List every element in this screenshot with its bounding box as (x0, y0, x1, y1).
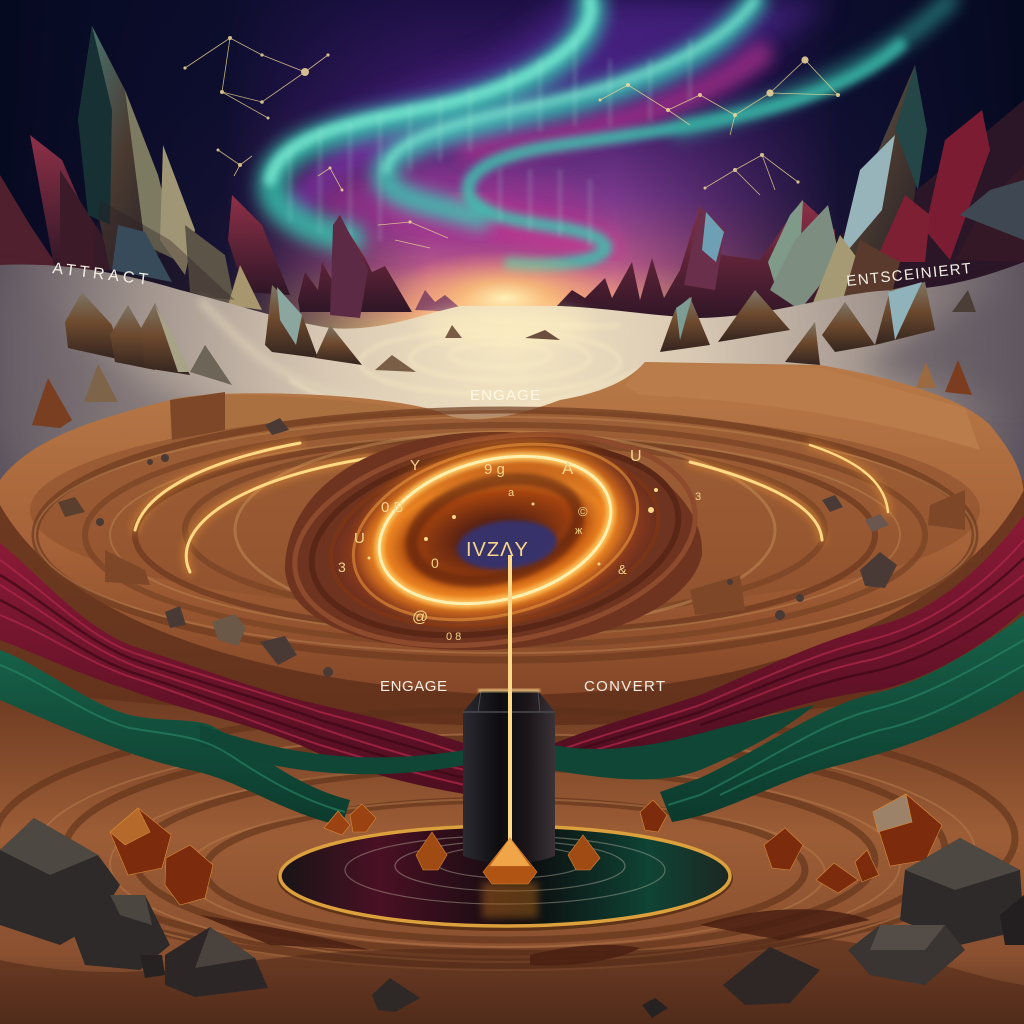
floating glyphs: © (578, 504, 588, 519)
floating glyphs: 9 g (484, 461, 505, 478)
horizon sun glow (385, 250, 625, 346)
label: entsceiniert: ENTSCEINIERT (846, 260, 972, 290)
central vortex (280, 408, 710, 672)
lower ground (0, 680, 1024, 1024)
floating glyphs: IVZΛY (466, 539, 529, 561)
floating glyphs: a (508, 487, 515, 499)
dark foreground rocks (0, 818, 1024, 1018)
floating glyphs: 0 (431, 555, 439, 571)
terrace boulders (58, 418, 897, 677)
vortex core (455, 516, 559, 574)
floating glyphs: U (354, 530, 365, 547)
floating glyphs: 0 8 (446, 631, 461, 643)
glowing ring (335, 416, 656, 648)
floating glyphs: U (630, 448, 642, 465)
floating glyphs: 0 B (381, 499, 404, 516)
sand dunes (0, 262, 1024, 480)
reflective pool (277, 825, 733, 931)
floating glyphs: & (618, 562, 627, 577)
night sky background (0, 0, 1024, 330)
black obelisk with light beam (463, 555, 555, 864)
floating glyphs (338, 448, 701, 643)
constellations (183, 36, 840, 248)
floating glyphs: @ (412, 609, 428, 626)
labels (52, 260, 972, 695)
upper terrace canyon (0, 362, 1024, 770)
silk ribbons: burgundy and green (0, 515, 1024, 826)
terrace notches (105, 392, 965, 615)
floating glyphs: 3 (338, 559, 346, 575)
label: engage lower: ENGAGE (380, 678, 447, 695)
crystal cluster: left (0, 26, 290, 310)
amber gems (110, 794, 942, 905)
floating glyphs: Y (410, 457, 420, 474)
mid-ground crystal groups on dunes (32, 282, 976, 428)
label: attract: ATTRACT (52, 260, 149, 289)
floating glyphs: ж (575, 525, 583, 537)
label: engage upper: ENGAGE (470, 387, 540, 404)
far crystal spires (298, 200, 835, 320)
label: convert: CONVERT (584, 678, 665, 695)
glowing arcs on terraces (135, 443, 888, 572)
crystal cluster: right (770, 65, 1024, 310)
floating glyphs: 3 (695, 491, 701, 503)
floating glyphs: A (562, 459, 574, 478)
aurora borealis (270, 0, 950, 265)
